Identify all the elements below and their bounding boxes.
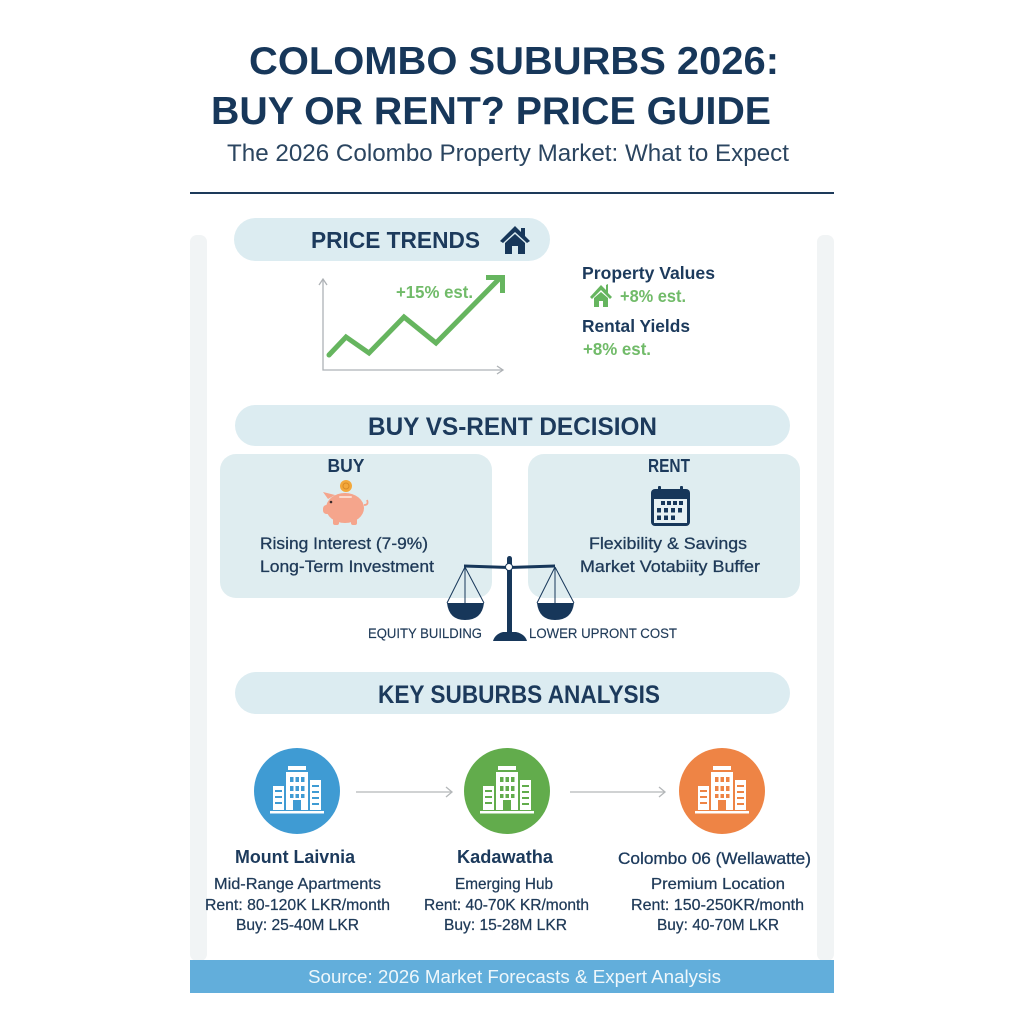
title: COLOMBO SUBURBS 2026: (249, 40, 779, 83)
suburb: Colombo 06: Rent: 150-250KR/month (631, 897, 804, 914)
suburb: Colombo 06: Colombo 06 (Wellawatte) (618, 849, 811, 868)
panel: rent: RENT (648, 456, 690, 476)
suburb: Mount Lavinia: Rent: 80-120K LKR/month (205, 897, 390, 914)
suburb: Kadawatha: Emerging Hub (455, 876, 553, 893)
title: BUY OR RENT? PRICE GUIDE (211, 90, 771, 133)
heading: buy vs rent (235, 405, 790, 446)
panel: buy: Long-Term Investment (260, 557, 434, 576)
stat: property values: Property Values (582, 263, 715, 283)
icon: green house (590, 284, 612, 307)
title (211, 40, 779, 133)
icon: house (500, 226, 530, 254)
heading: price trends (234, 218, 550, 261)
stat: rental yields: Rental Yields (582, 316, 690, 336)
heading: key suburbs (235, 672, 790, 714)
suburb: Kadawatha: Rent: 40-70K KR/month (424, 897, 589, 914)
arrow: green to orange (570, 787, 665, 797)
arrow: blue to green (356, 787, 452, 797)
icon: piggy bank (323, 480, 368, 525)
subtitle: The 2026 Colombo Property Market: What to Expect (227, 140, 789, 167)
suburb: Kadawatha (424, 748, 589, 934)
suburb: Colombo 06 (618, 748, 811, 934)
panel: buy: BUY (328, 456, 364, 476)
suburb: Mount Lavinia (205, 748, 390, 934)
heading: price trends: PRICE TRENDS (311, 227, 480, 253)
line chart (319, 275, 505, 374)
icon: calendar (651, 486, 690, 526)
icon: blue building circle (254, 748, 340, 834)
heading: buy vs rent: BUY VS-RENT DECISION (368, 413, 657, 441)
heading: key suburbs: KEY SUBURBS ANALYSIS (378, 681, 660, 709)
suburb: Colombo 06: Premium Location (651, 876, 785, 893)
suburb: Mount Lavinia: Buy: 25-40M LKR (236, 917, 359, 934)
suburb: Mount Lavinia: Mount Laivnia (235, 847, 356, 867)
label: equity building: EQUITY BUILDING (368, 626, 482, 641)
label: lower upfront cost: LOWER UPRONT COST (529, 626, 677, 641)
panel: rent: Market Votabiity Buffer (580, 557, 760, 576)
stat: rental yields: +8% est. (583, 339, 651, 359)
line chart: +15% est. (396, 282, 473, 302)
suburb: Kadawatha: Kadawatha (457, 847, 554, 867)
panel: buy: Rising Interest (7-9%) (260, 534, 428, 553)
suburb: Kadawatha: Buy: 15-28M LKR (444, 917, 567, 934)
footer: source: Source: 2026 Market Forecasts & Expert Analysis (308, 967, 721, 987)
panel: rent (528, 454, 800, 598)
stat: property values (582, 263, 715, 307)
icon: green building circle (464, 748, 550, 834)
icon: orange building circle (679, 748, 765, 834)
stat: rental yields (582, 316, 690, 359)
footer: source (190, 960, 834, 993)
suburb: Colombo 06: Buy: 40-70M LKR (657, 917, 779, 934)
panel: buy (220, 454, 492, 598)
stat: property values: +8% est. (620, 286, 686, 306)
panel: rent: Flexibility & Savings (589, 534, 747, 553)
icon: balance scale (447, 556, 574, 641)
suburb: Mount Lavinia: Mid-Range Apartments (214, 876, 381, 893)
